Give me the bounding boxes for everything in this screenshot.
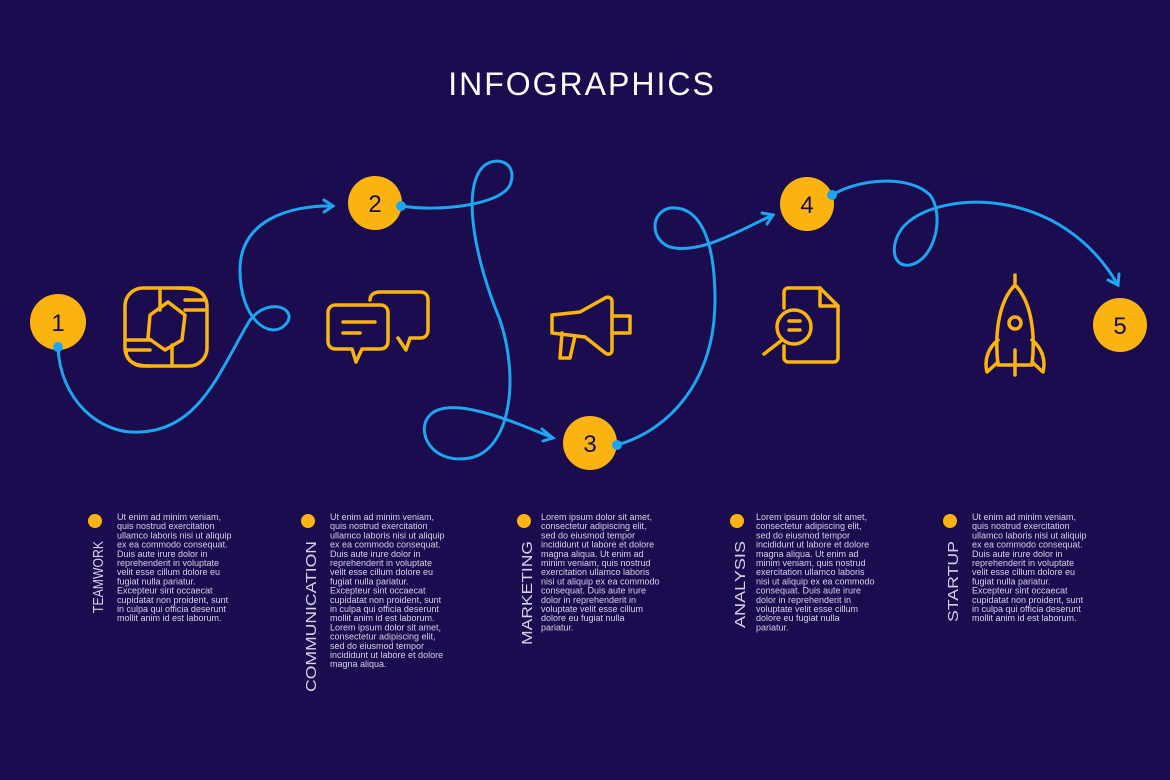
column: startup: quis nostrud exercitation bbox=[972, 521, 1070, 531]
column: startup: fugiat nulla pariatur. bbox=[972, 576, 1051, 586]
column: marketing: minim veniam, quis nostrud bbox=[541, 558, 651, 568]
column: communication: ex ea commodo consequat. bbox=[330, 540, 441, 550]
column: communication: Ut enim ad minim veniam, bbox=[330, 512, 434, 522]
step 3 marker: 3 bbox=[583, 431, 597, 458]
column: analysis: incididunt ut labore et dolore bbox=[756, 540, 869, 550]
icon: chat bubbles bbox=[328, 292, 428, 362]
column: analysis: dolor in reprehenderit in bbox=[756, 595, 851, 605]
step 1 marker: 1 bbox=[51, 310, 65, 337]
icon: megaphone bbox=[552, 297, 630, 358]
column: communication: ullamco laboris nisi ut aliquip bbox=[330, 530, 445, 540]
column: analysis: consequat. Duis aute irure bbox=[756, 586, 861, 596]
column: teamwork: reprehenderit in voluptate bbox=[117, 558, 219, 568]
column: communication: incididunt ut labore et dolore bbox=[330, 650, 443, 660]
step 5 marker: 5 bbox=[1113, 313, 1127, 340]
column: startup: STARTUP bbox=[945, 541, 962, 622]
column: communication: sed do eiusmod tempor bbox=[330, 641, 424, 651]
column: communication: magna aliqua. bbox=[330, 659, 387, 669]
column: teamwork: Duis aute irure dolor in bbox=[117, 549, 208, 559]
column: startup: cupidatat non proident, sunt bbox=[972, 595, 1084, 605]
column: startup: mollit anim id est laborum. bbox=[972, 613, 1077, 623]
column: analysis: voluptate velit esse cillum bbox=[756, 604, 858, 614]
path connector bbox=[58, 161, 1119, 459]
column: communication: Lorem ipsum dolor sit amet, bbox=[330, 622, 441, 632]
column: startup: velit esse cillum dolore eu bbox=[972, 567, 1075, 577]
column: startup: ex ea commodo consequat. bbox=[972, 540, 1083, 550]
column: marketing: Lorem ipsum dolor sit amet, bbox=[541, 512, 652, 522]
column: analysis: exercitation ullamco laboris bbox=[756, 567, 865, 577]
column: teamwork: velit esse cillum dolore eu bbox=[117, 567, 220, 577]
column: marketing: incididunt ut labore et dolore bbox=[541, 540, 654, 550]
column: analysis: magna aliqua. Ut enim ad bbox=[756, 549, 859, 559]
column: startup bbox=[943, 512, 1087, 623]
column: communication: reprehenderit in voluptate bbox=[330, 558, 432, 568]
column: analysis: pariatur. bbox=[756, 622, 789, 632]
column: teamwork: ullamco laboris nisi ut aliquip bbox=[117, 530, 232, 540]
column: analysis: consectetur adipiscing elit, bbox=[756, 521, 862, 531]
column: marketing: MARKETING bbox=[519, 541, 536, 645]
column: communication: in culpa qui officia deserunt bbox=[330, 604, 439, 614]
column: teamwork: Ut enim ad minim veniam, bbox=[117, 512, 221, 522]
column: analysis: sed do eiusmod tempor bbox=[756, 530, 850, 540]
column: marketing: voluptate velit esse cillum bbox=[541, 604, 643, 614]
title: INFOGRAPHICS bbox=[448, 66, 716, 102]
column: startup: reprehenderit in voluptate bbox=[972, 558, 1074, 568]
column: teamwork: Excepteur sint occaecat bbox=[117, 586, 213, 596]
column: teamwork bbox=[88, 512, 232, 623]
column: marketing: pariatur. bbox=[541, 622, 574, 632]
column: marketing: dolore eu fugiat nulla bbox=[541, 613, 625, 623]
column: marketing: sed do eiusmod tempor bbox=[541, 530, 635, 540]
column: analysis: Lorem ipsum dolor sit amet, bbox=[756, 512, 867, 522]
column: analysis: nisi ut aliquip ex ea commodo bbox=[756, 576, 875, 586]
column: startup: ullamco laboris nisi ut aliquip bbox=[972, 530, 1087, 540]
column: marketing: consectetur adipiscing elit, bbox=[541, 521, 647, 531]
icon: analysis document bbox=[764, 288, 838, 362]
column: analysis bbox=[730, 512, 875, 632]
step 5 marker bbox=[1093, 298, 1147, 352]
column: startup: Excepteur sint occaecat bbox=[972, 586, 1068, 596]
column: communication: Excepteur sint occaecat bbox=[330, 586, 426, 596]
column: marketing: nisi ut aliquip ex ea commodo bbox=[541, 576, 660, 586]
column: analysis: dolore eu fugiat nulla bbox=[756, 613, 840, 623]
column: analysis: ANALYSIS bbox=[732, 541, 749, 628]
column: marketing: exercitation ullamco laboris bbox=[541, 567, 650, 577]
column: communication bbox=[301, 512, 445, 692]
column: marketing: consequat. Duis aute irure bbox=[541, 586, 646, 596]
column: teamwork: quis nostrud exercitation bbox=[117, 521, 215, 531]
column: teamwork: cupidatat non proident, sunt bbox=[117, 595, 229, 605]
column: teamwork: fugiat nulla pariatur. bbox=[117, 576, 196, 586]
column: startup: in culpa qui officia deserunt bbox=[972, 604, 1081, 614]
step 1 marker bbox=[30, 294, 86, 352]
column: communication: Duis aute irure dolor in bbox=[330, 549, 421, 559]
icon: rocket bbox=[986, 275, 1044, 375]
column: communication: mollit anim id est laborum. bbox=[330, 613, 435, 623]
column: marketing: dolor in reprehenderit in bbox=[541, 595, 636, 605]
column: teamwork: in culpa qui officia deserunt bbox=[117, 604, 226, 614]
column: marketing bbox=[517, 512, 660, 645]
column: communication: fugiat nulla pariatur. bbox=[330, 576, 409, 586]
step 4 marker: 4 bbox=[800, 192, 814, 219]
step 3 marker bbox=[563, 416, 622, 470]
step 4 marker bbox=[780, 177, 837, 231]
column: communication: cupidatat non proident, sunt bbox=[330, 595, 442, 605]
column: communication: consectetur adipiscing elit, bbox=[330, 632, 436, 642]
column: communication: COMMUNICATION bbox=[303, 541, 320, 692]
column: startup: Duis aute irure dolor in bbox=[972, 549, 1063, 559]
column: communication: quis nostrud exercitation bbox=[330, 521, 428, 531]
step 2 marker: 2 bbox=[368, 191, 382, 218]
column: teamwork: ex ea commodo consequat. bbox=[117, 540, 228, 550]
icon: teamwork hands bbox=[125, 288, 207, 366]
column: communication: velit esse cillum dolore eu bbox=[330, 567, 433, 577]
step 2 marker bbox=[348, 176, 406, 230]
column: startup: Ut enim ad minim veniam, bbox=[972, 512, 1076, 522]
column: marketing: magna aliqua. Ut enim ad bbox=[541, 549, 644, 559]
column: teamwork: mollit anim id est laborum. bbox=[117, 613, 222, 623]
column: analysis: minim veniam, quis nostrud bbox=[756, 558, 866, 568]
column: teamwork: TEAMWORK bbox=[90, 541, 107, 613]
